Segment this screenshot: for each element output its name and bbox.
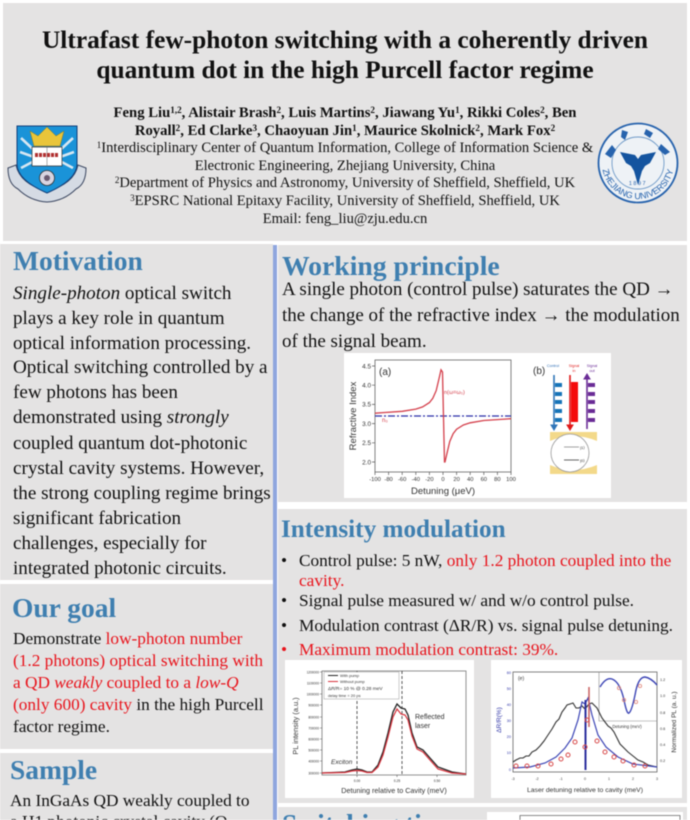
panel: working principle bbox=[278, 245, 687, 502]
chart: modulation contrast vs laser detuning: 0.2 bbox=[660, 759, 665, 763]
chart: PL intensity vs detuning: ΔR/R= 10 % @ 0.28 meV bbox=[328, 686, 383, 692]
chart: modulation contrast vs laser detuning: Laser detuning relative to cavity (meV) bbox=[527, 787, 643, 794]
diagram: control and signal pulses on the cavity: in bbox=[573, 369, 575, 373]
panel: switching time bbox=[278, 807, 687, 820]
chart: PL intensity vs detuning: 0.00 bbox=[354, 779, 360, 783]
chart: modulation contrast vs laser detuning: 30 bbox=[507, 719, 511, 723]
icon: Zhejiang University seal: 1897 bbox=[629, 181, 647, 187]
column divider bbox=[273, 245, 276, 820]
chart: modulation contrast vs laser detuning: -3 bbox=[511, 777, 515, 781]
working principle text bbox=[282, 279, 680, 352]
icon: University of Sheffield crest bbox=[6, 124, 88, 204]
chart: refractive index vs detuning: 20 bbox=[453, 477, 460, 483]
chart: PL intensity vs detuning: 1200000 bbox=[307, 670, 319, 674]
motivation text: significant fabrication bbox=[13, 508, 181, 529]
diagram: control and signal pulses on the cavity: |0⟩ bbox=[580, 458, 585, 463]
affiliations and email: Electronic Engineering, Zhejiang University, China bbox=[195, 158, 495, 174]
chart: refractive index vs detuning: 3.0 bbox=[362, 421, 371, 428]
chart: refractive index vs detuning: 3.5 bbox=[362, 402, 371, 408]
chart: refractive index vs detuning: -100 bbox=[369, 477, 381, 483]
chart: PL intensity vs detuning: 1000000 bbox=[307, 692, 319, 696]
chart: modulation contrast vs laser detuning: 1.2 bbox=[660, 678, 665, 682]
chart: modulation contrast vs laser detuning: -1 bbox=[559, 777, 563, 781]
chart: refractive index vs detuning: (a) bbox=[379, 367, 391, 378]
affiliations and email: 2Department of Physics and Astronomy, University of Sheffield, Sheffield, UK bbox=[115, 175, 575, 191]
chart: modulation contrast vs laser detuning: 1 bbox=[608, 777, 610, 781]
goal text: factor regime. bbox=[13, 717, 110, 736]
chart: modulation contrast vs laser detuning: 3 bbox=[656, 777, 658, 781]
diagram: control and signal pulses on the cavity: Control bbox=[547, 364, 559, 368]
bullet list: • bbox=[281, 640, 287, 659]
goal text bbox=[12, 629, 264, 736]
title bbox=[42, 26, 648, 84]
bullet list: • bbox=[281, 591, 287, 610]
bullet list: Modulation contrast (ΔR/R) vs. signal pulse detuning. bbox=[299, 616, 673, 635]
goal text: (1.2 photons) optical switching with bbox=[13, 651, 263, 670]
chart: PL intensity vs detuning: 500000 bbox=[308, 748, 319, 752]
chart: PL intensity vs detuning: 800000 bbox=[308, 716, 319, 720]
heading: working principle: Working principle bbox=[282, 250, 500, 281]
chart: modulation contrast vs laser detuning: 20 bbox=[507, 735, 511, 739]
authors: Royall2, Ed Clarke3, Chaoyuan Jin1, Maurice Skolnick2, Mark Fox2 bbox=[135, 123, 555, 139]
chart: modulation contrast vs laser detuning: 0.4 bbox=[660, 743, 665, 747]
chart: modulation contrast vs laser detuning: (e) bbox=[518, 676, 524, 682]
chart: modulation contrast vs laser detuning: 0 bbox=[509, 768, 511, 772]
chart: PL intensity vs detuning: 700000 bbox=[308, 726, 319, 730]
sample text: An InGaAs QD weakly coupled to bbox=[10, 791, 249, 810]
heading: sample: Sample bbox=[10, 754, 97, 785]
chart: refractive index vs detuning: Detuning (μeV) bbox=[411, 486, 475, 497]
bullet list: Control pulse: 5 nW, only 1.2 photon coupled into the bbox=[299, 551, 671, 570]
chart: PL intensity vs detuning: delay time = 20 ps bbox=[328, 693, 361, 698]
panel: sample bbox=[0, 753, 273, 820]
chart: refractive index vs detuning: -20 bbox=[425, 477, 434, 483]
affiliations and email: 3EPSRC National Epitaxy Facility, University of Sheffield, Sheffield, UK bbox=[130, 193, 560, 209]
affiliations and email: Email: feng_liu@zju.edu.cn bbox=[263, 211, 427, 227]
bullet list: cavity. bbox=[299, 571, 344, 590]
figure background: refractive index chart and level scheme bbox=[344, 353, 611, 498]
chart: modulation contrast vs laser detuning: Normalized PL (a. u.) bbox=[671, 691, 678, 753]
bullet list: • bbox=[281, 551, 287, 570]
authors: Feng Liu1,2, Alistair Brash2, Luis Martins2, Jiawang Yu1, Rikki Coles2, Ben bbox=[114, 105, 576, 121]
icon: Zhejiang University seal: ZHEJIANG UNIVERSITY bbox=[602, 168, 674, 200]
motivation text bbox=[12, 283, 271, 579]
goal text: Demonstrate low-photon number bbox=[13, 629, 242, 648]
chart: refractive index vs detuning: 40 bbox=[467, 477, 473, 483]
chart: refractive index vs detuning: 60 bbox=[481, 477, 487, 483]
chart: modulation contrast vs laser detuning: 0.6 bbox=[660, 727, 665, 731]
chart: PL intensity vs detuning: PL intensity (a.u.) bbox=[291, 697, 300, 755]
affiliations and email bbox=[97, 140, 594, 227]
diagram: control and signal pulses on the cavity: out bbox=[589, 369, 596, 373]
diagram: control and signal pulses on the cavity: Signal bbox=[569, 364, 579, 368]
title: Ultrafast few-photon switching with a coherently driven bbox=[42, 26, 648, 54]
panel: our goal bbox=[0, 584, 273, 749]
chart: modulation contrast vs laser detuning: 2 bbox=[632, 777, 634, 781]
motivation text: crystal cavity systems. However, bbox=[13, 458, 264, 479]
affiliations and email: 1Interdisciplinary Center of Quantum Information, College of Information Science & bbox=[97, 140, 593, 156]
heading: our goal: Our goal bbox=[12, 592, 116, 623]
panel: motivation bbox=[0, 244, 273, 580]
chart: PL intensity vs detuning: Exciton bbox=[331, 759, 353, 766]
working principle text: the change of the refractive index → the modulation bbox=[282, 305, 680, 326]
chart: modulation contrast vs laser detuning: 40 bbox=[507, 703, 511, 707]
diagram: control and signal pulses on the cavity: (b) bbox=[533, 366, 545, 377]
chart: modulation contrast vs laser detuning: ΔR/R(%) bbox=[496, 707, 503, 733]
chart: refractive index vs detuning: 2.5 bbox=[362, 440, 371, 447]
chart: refractive index vs detuning: n(ω=ω₀) bbox=[444, 390, 465, 396]
chart: refractive index vs detuning: 2.0 bbox=[362, 460, 371, 466]
chart: PL intensity vs detuning: 0.50 bbox=[434, 779, 440, 783]
chart: refractive index vs detuning: 80 bbox=[494, 477, 501, 483]
icon: Zhejiang University seal bbox=[596, 122, 680, 204]
goal text: a QD weakly coupled to a low-Q bbox=[13, 673, 239, 692]
chart: PL intensity vs detuning: With pump bbox=[340, 673, 360, 678]
chart: refractive index vs detuning: -60 bbox=[398, 477, 406, 483]
chart: refractive index vs detuning: 4.5 bbox=[362, 364, 371, 370]
bullet list: Signal pulse measured w/ and w/o control pulse. bbox=[299, 591, 634, 610]
chart: modulation contrast vs laser detuning: 0 bbox=[584, 777, 586, 781]
chart: PL intensity vs detuning: laser bbox=[415, 723, 431, 730]
motivation text: demonstrated using strongly bbox=[13, 407, 229, 428]
motivation text: optical information processing. bbox=[13, 333, 251, 354]
heading: motivation: Motivation bbox=[13, 245, 143, 276]
motivation text: plays a key role in quantum bbox=[13, 308, 225, 329]
motivation text: the strong coupling regime brings bbox=[13, 483, 271, 504]
chart: modulation contrast vs laser detuning: 60 bbox=[507, 671, 511, 675]
chart: PL intensity vs detuning: 600000 bbox=[308, 738, 319, 742]
chart: refractive index vs detuning: 4.0 bbox=[362, 382, 371, 390]
diagram: control and signal pulses on the cavity: |1⟩ bbox=[580, 445, 585, 450]
motivation text: challenges, especially for bbox=[13, 533, 207, 554]
panel: intensity modulation bbox=[278, 509, 687, 803]
working principle text: of the signal beam. bbox=[282, 331, 427, 352]
chart: PL intensity vs detuning: Detuning relative to Cavity (meV) bbox=[341, 786, 447, 795]
chart: PL intensity vs detuning: 300000 bbox=[308, 772, 319, 776]
chart: modulation contrast vs laser detuning: -2 bbox=[535, 777, 539, 781]
chart: refractive index vs detuning: -40 bbox=[412, 477, 420, 483]
heading: intensity modulation: Intensity modulation bbox=[281, 516, 506, 543]
motivation text: Optical switching controlled by a bbox=[13, 357, 268, 378]
chart: refractive index vs detuning: 100 bbox=[506, 477, 516, 483]
sample text bbox=[10, 791, 250, 820]
chart: PL intensity vs detuning: 1100000 bbox=[307, 682, 319, 686]
chart: modulation contrast vs laser detuning: 1.0 bbox=[660, 694, 665, 698]
goal text: (only 600) cavity in the high Purcell bbox=[13, 695, 264, 714]
chart: PL intensity vs detuning: 900000 bbox=[308, 704, 319, 708]
chart: PL intensity vs detuning: 400000 bbox=[308, 760, 319, 764]
title: quantum dot in the high Purcell factor regime bbox=[96, 56, 594, 84]
motivation text: few photons has been bbox=[13, 382, 178, 403]
chart: refractive index vs detuning: n₀ bbox=[382, 418, 388, 424]
motivation text: Single-photon optical switch bbox=[13, 283, 231, 304]
chart: refractive index vs detuning: Refractive Index bbox=[348, 381, 359, 450]
chart: modulation contrast vs laser detuning: Detuning (meV) bbox=[612, 724, 642, 729]
chart: refractive index vs detuning: -80 bbox=[384, 477, 393, 483]
diagram: control and signal pulses on the cavity: Signal bbox=[587, 364, 597, 368]
bullet list: • bbox=[281, 616, 287, 635]
chart: PL intensity vs detuning: Reflected bbox=[415, 714, 445, 721]
motivation text: integrated photonic circuits. bbox=[13, 558, 227, 579]
motivation text: coupled quantum dot-photonic bbox=[13, 433, 247, 454]
bullet list: Maximum modulation contrast: 39%. bbox=[299, 640, 558, 659]
header panel bbox=[3, 3, 687, 241]
chart: modulation contrast vs laser detuning: 10 bbox=[507, 751, 511, 755]
chart: PL intensity vs detuning: 0.25 bbox=[394, 779, 400, 783]
working principle text: A single photon (control pulse) saturates the QD → bbox=[282, 279, 674, 300]
chart: refractive index vs detuning: 0 bbox=[441, 477, 445, 483]
chart: modulation contrast vs laser detuning: 50 bbox=[507, 687, 511, 691]
authors bbox=[113, 105, 577, 139]
chart: PL intensity vs detuning: Without pump bbox=[340, 679, 365, 684]
chart: modulation contrast vs laser detuning: 0.8 bbox=[660, 711, 665, 715]
